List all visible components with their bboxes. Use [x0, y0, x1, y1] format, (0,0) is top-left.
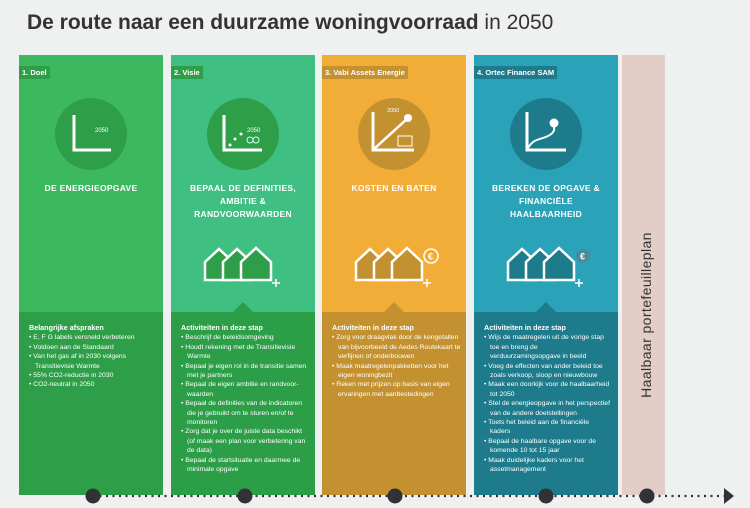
icon: chart 2050: 2050: [95, 128, 109, 134]
heading: RANDVOORWAARDEN: [194, 209, 292, 219]
icon: houses euro: [354, 246, 439, 287]
icon: chart line: 2050: [387, 108, 399, 114]
text block: Maak duidelijke kaders voor het assetmanagement: [488, 457, 584, 473]
label: 2. Visie: 2. Visie: [174, 68, 200, 77]
text block: 55% CO2-reductie in 2030: [33, 372, 113, 379]
panel: portefeuilleplan: [622, 55, 665, 495]
timeline: [86, 488, 734, 504]
icon: houses euro: €: [580, 252, 585, 262]
text block: Maak een doorkijk voor de haalbaarheid tot 2050: [488, 381, 609, 398]
text block: Reken met prijzen op basis van eigen ervaringen met aanbestedingen: [336, 381, 450, 398]
text block: [19, 312, 163, 495]
label: 4. Ortec: 4. Ortec Finance SAM: [477, 68, 554, 77]
text block: Voeg de effecten van ander beleid toe zoals verkoop, sloop en nieuwbouw: [488, 363, 603, 379]
text block: Bepaal de definities van de indicatoren die je gebruikt om te sturen en/of te monitoren: [185, 400, 302, 426]
title: De route naar een duurzame woningvoorraad in 2050: [27, 11, 553, 34]
icon: chart 2050: [55, 98, 127, 170]
heading: BEREKEN DE OPGAVE &: [492, 183, 600, 193]
text block: [322, 312, 466, 495]
heading: KOSTEN EN BATEN: [351, 183, 437, 193]
text block: CO2-neutral in 2050: [33, 381, 94, 388]
label: 3. Vabi: [322, 66, 408, 79]
rotated label: Haalbaar portefeuilleplan: [638, 232, 654, 398]
heading: AMBITIE &: [220, 196, 266, 206]
text block: Bepaal de haalbare opgave voor de komende 10 tot 15 jaar: [488, 438, 596, 454]
icon: houses euro: €: [428, 252, 433, 262]
text block: Toets het beleid aan de financiële kaders: [488, 419, 589, 435]
icon: houses euro: [506, 246, 590, 287]
text block: Houdt rekening met de Transitievisie Warmte: [185, 344, 295, 360]
text block: Stel de energieopgave in het perspectief van de andere doelstellingen: [488, 400, 610, 417]
panel: 2 visie: [171, 55, 315, 495]
icon: houses: [204, 246, 280, 287]
label: 2. Visie: [171, 66, 203, 79]
panel: 4 ortec: [474, 55, 618, 495]
label: 4. Ortec: [474, 66, 557, 79]
arrow: [724, 488, 734, 504]
text block: Bepaal je eigen rol in de transitie samen met je partners: [185, 363, 306, 379]
heading: BEPAAL DE DEFINITIES,: [190, 183, 296, 193]
icon: chart curve: [510, 98, 582, 170]
heading: HAALBAARHEID: [510, 209, 582, 219]
text block: Zorg voor draagvlak door de kengetallen van bijvoorbeeld de Aedes Routekaart te verfijnen of onderbouwen: [336, 334, 460, 360]
icon: chart line: [358, 98, 430, 170]
icon: chart dots: 2050: [247, 128, 261, 134]
text block: Bepaal de eigen ambitie en randvoor-waarden: [185, 381, 299, 398]
text block: Maak maatregelenpakketten voor het eigen woningbezit: [336, 363, 448, 379]
text block: Van het gas af in 2030 volgens Transitievisie Warmte: [33, 353, 126, 370]
label: 1. Doel: [19, 66, 50, 79]
panel: 1 doel: [19, 55, 163, 495]
icon: chart dots: [207, 98, 279, 170]
panel: 3 vabi: [322, 55, 466, 495]
label: 3. Vabi: 3. Vabi Assets Energie: [325, 68, 405, 77]
text block: [171, 312, 315, 495]
heading: [190, 183, 296, 219]
text block: Belangrijke afspraken: [29, 323, 104, 332]
text block: Wijs de maatregelen uit de vorige stap toe en breng de verduurzamingsopgave in beeld: [488, 334, 604, 360]
text block: Voldoen aan de Standaard: [33, 344, 114, 351]
text block: Activiteiten in deze stap: [332, 323, 414, 332]
text block: Activiteiten in deze stap: [484, 323, 566, 332]
text block: Activiteiten in deze stap: [181, 323, 263, 332]
label: 1. Doel: 1. Doel: [22, 68, 47, 77]
heading: DE ENERGIEOPGAVE: [45, 183, 137, 193]
text block: E, F G labels versneld verbeteren: [33, 334, 135, 341]
heading: [492, 183, 600, 219]
text block: [474, 312, 618, 495]
text block: Beschrijf de beleidsomgeving: [185, 334, 274, 341]
text block: Bepaal de startsituatie en daarmee de minimale opgave: [185, 457, 300, 473]
text block: Zorg dat je over de juiste data beschikt (of maak een plan voor verbetering van de data): [185, 428, 305, 454]
heading: FINANCIËLE: [519, 196, 573, 206]
